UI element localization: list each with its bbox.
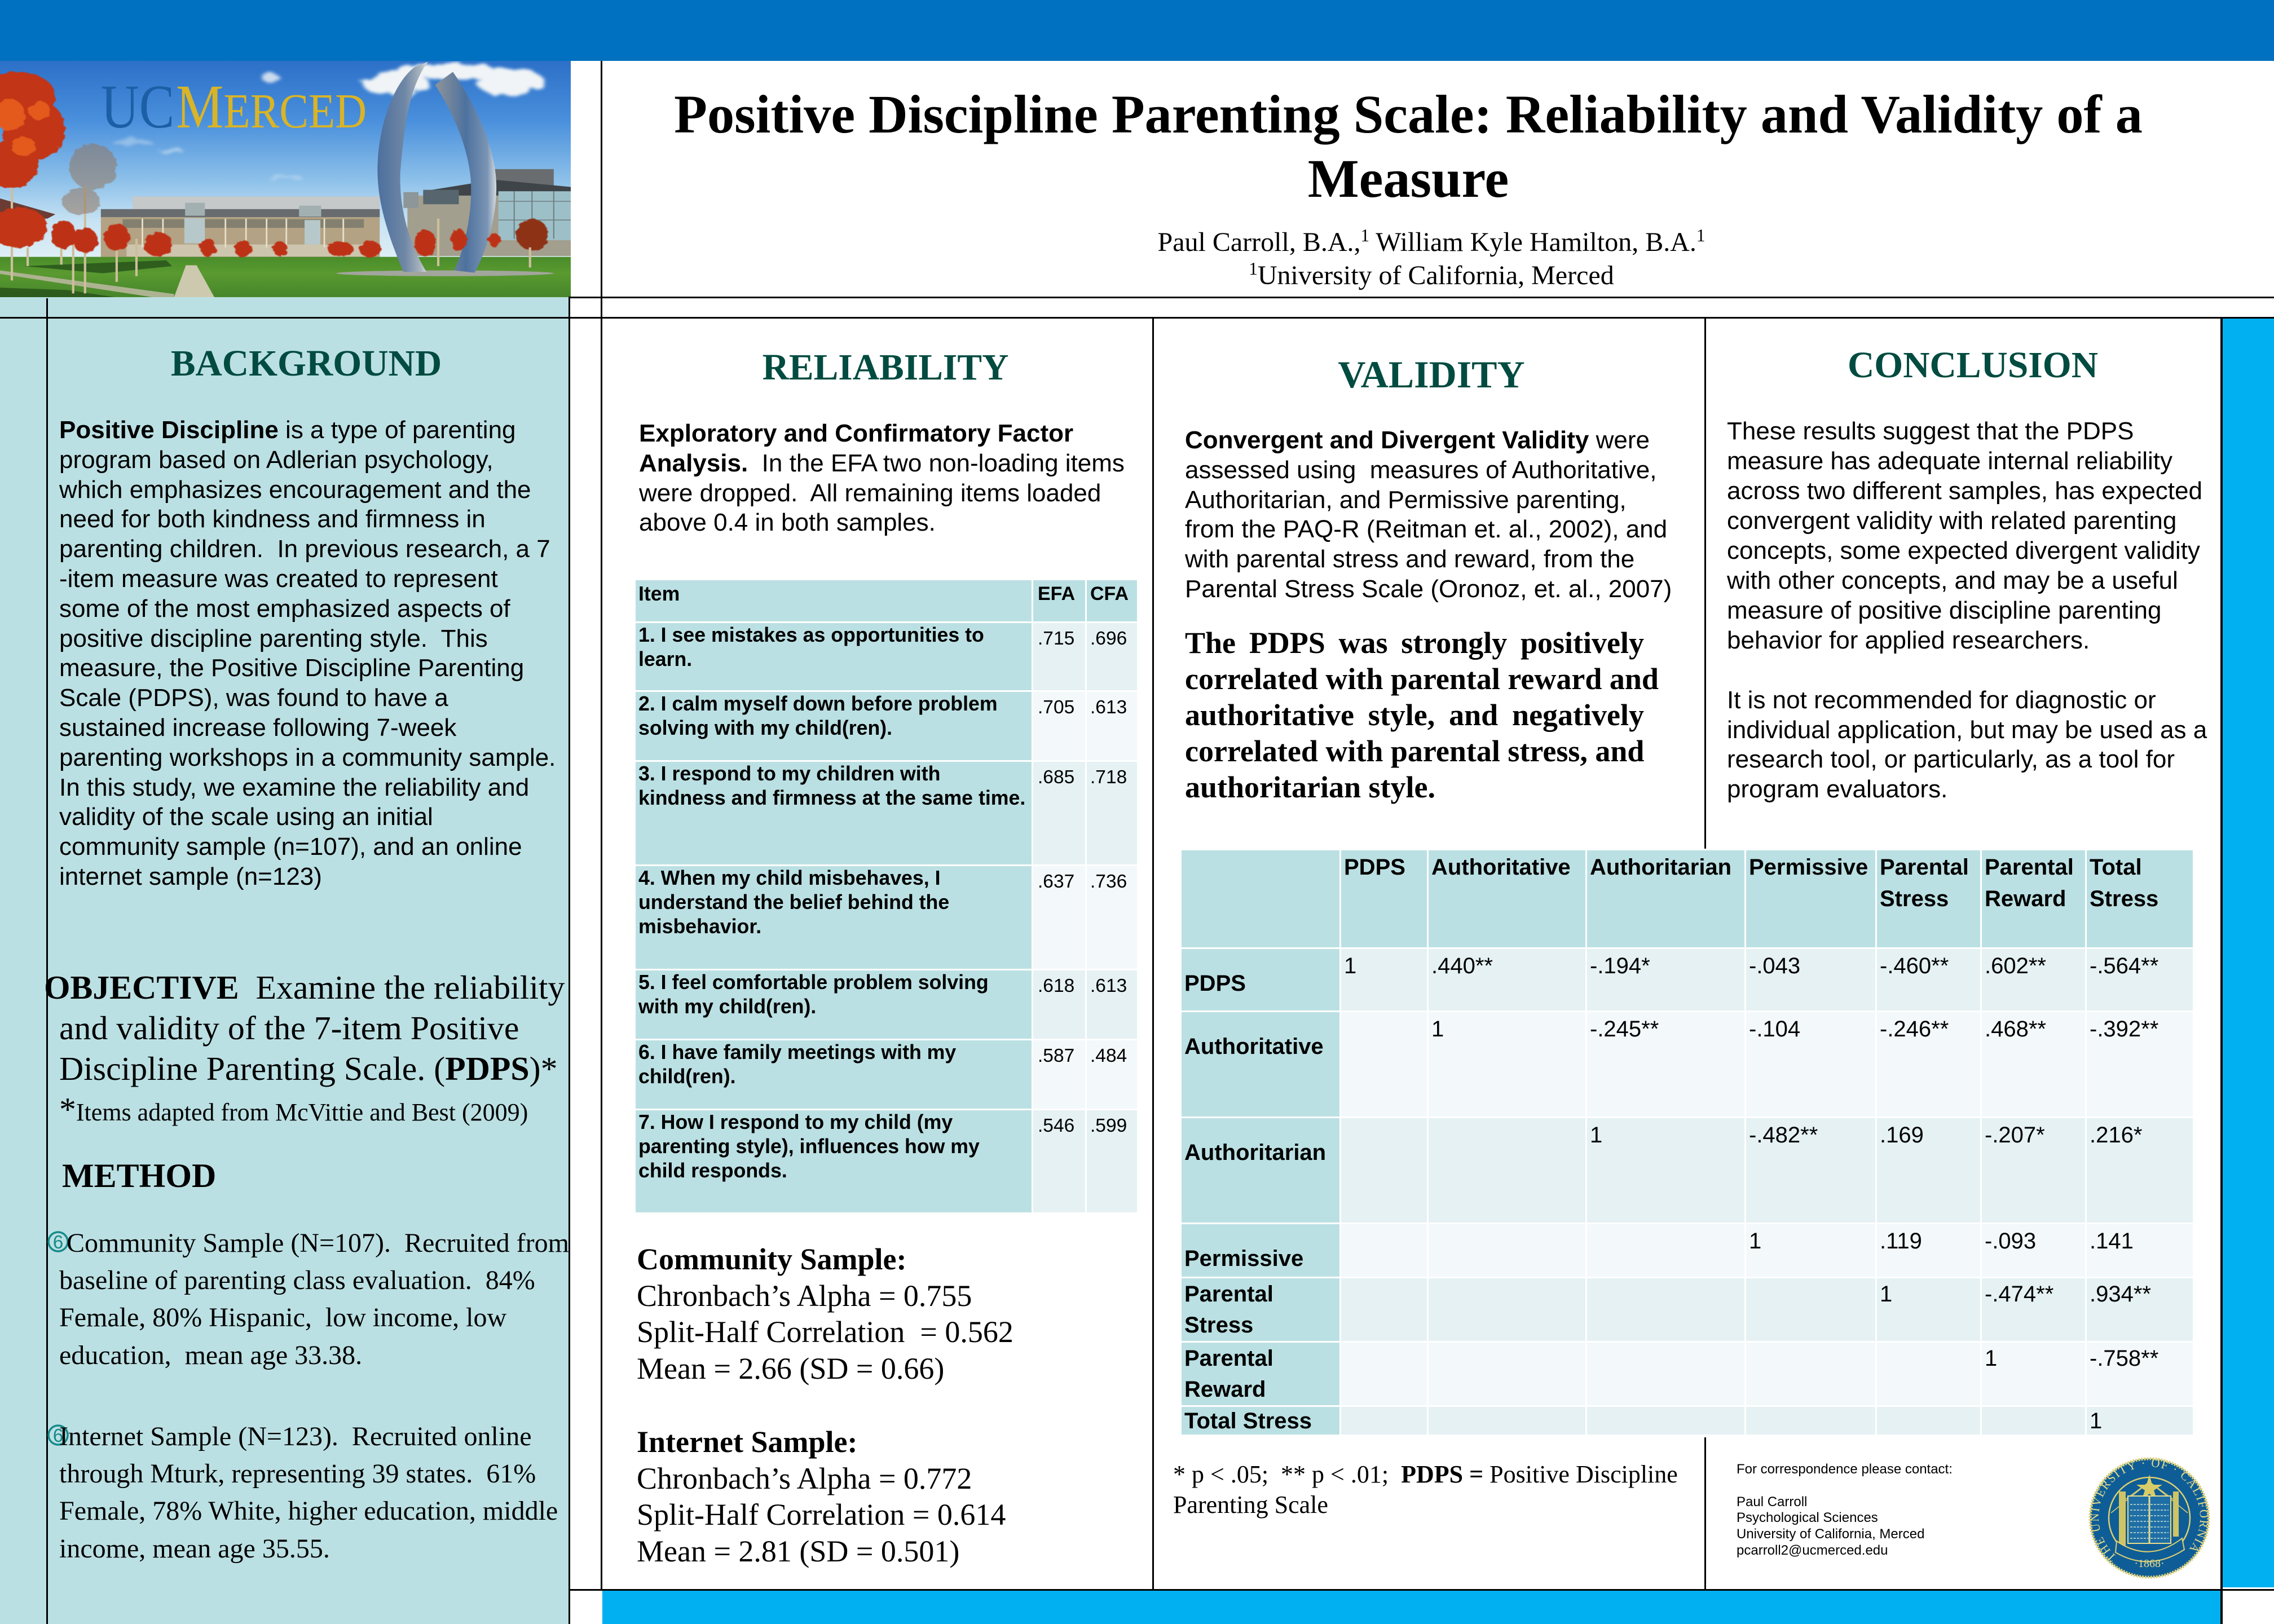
table: factor loadings: EFA: [1038, 583, 1075, 604]
trees: [12, 173, 438, 293]
sculpture arches: [377, 62, 428, 272]
text: conclusion: program evaluators.: [1727, 775, 1947, 803]
text: background: some of the most emphasized aspects of: [59, 595, 510, 623]
table: correlations: .440**: [1431, 954, 1493, 978]
authors: Paul Carroll, B.A.,1 William Kyle Hamilton, B.A.1: [1158, 226, 1705, 257]
text: validity: Convergent and Divergent Validity were: [1185, 426, 1650, 454]
stats: community sample: Chronbach’s Alpha = 0.755: [637, 1279, 972, 1313]
key finding: authoritarian style.: [1185, 770, 1435, 804]
text: conclusion: concepts, some expected divergent validity: [1727, 537, 2200, 564]
table: correlations: Authoritarian: [1184, 1140, 1326, 1165]
table: correlations: Authoritative: [1184, 1034, 1324, 1059]
table: factor loadings: .637: [1038, 871, 1074, 892]
table: correlations: 1: [1985, 1346, 1997, 1371]
table: factor loadings: .546: [1038, 1115, 1074, 1136]
table: correlations: 1: [1344, 954, 1356, 978]
table: correlations: Parental: [1184, 1282, 1273, 1307]
table: correlations: -.245**: [1590, 1017, 1659, 1042]
text: background: parenting workshops in a community sample.: [59, 744, 556, 771]
stats: internet sample: [637, 1425, 1006, 1568]
table: correlations: -.460**: [1880, 954, 1949, 978]
sculpture base: [336, 271, 554, 276]
table: correlations: -.104: [1749, 1017, 1800, 1042]
key finding: The PDPS was strongly positively: [1185, 626, 1644, 660]
table: correlations: -.093: [1985, 1229, 2036, 1254]
contact: Paul Carroll: [1737, 1494, 1807, 1510]
key finding: [1185, 626, 1659, 804]
text: conclusion: across two different samples, has expected: [1727, 477, 2202, 505]
table: correlations: -.043: [1749, 954, 1800, 978]
text: background: parenting children. In previous research, a 7: [59, 535, 550, 563]
contact: [1737, 1462, 1953, 1559]
table: factor loadings: child responds.: [638, 1159, 787, 1182]
text: conclusion: individual application, but may be used as a: [1727, 716, 2207, 744]
table: correlations: 1: [1880, 1282, 1892, 1307]
bullet: internet: 6: [53, 1425, 63, 1446]
table: correlations: Permissive: [1749, 855, 1868, 880]
text: validity: assessed using measures of Authoritative,: [1185, 456, 1656, 484]
footnote: Parenting Scale: [1173, 1491, 1328, 1519]
objective: and validity of the 7-item Positive: [59, 1009, 519, 1047]
contact: For correspondence please contact:: [1737, 1462, 1953, 1477]
table: factor loadings: understand the belief behind the: [638, 891, 949, 914]
table: correlations: Parental: [1184, 1346, 1273, 1371]
table: factor loadings: solving with my child(ren).: [638, 717, 892, 739]
table: correlations: Stress: [1184, 1313, 1253, 1338]
table: factor loadings: .696: [1090, 628, 1127, 649]
table: correlations: .934**: [2090, 1282, 2151, 1307]
table: factor loadings: 7. How I respond to my child (my: [638, 1111, 953, 1133]
left teal panel background: [0, 297, 570, 1624]
table: factor loadings: 6. I have family meetings with my: [638, 1041, 956, 1063]
table: correlations: -.246**: [1880, 1017, 1949, 1042]
icon: university seal: THE UNIVERSITY · OF · CALIFORNIA: [2091, 1459, 2208, 1562]
heading: method: METHOD: [62, 1157, 216, 1194]
text: background: which emphasizes encouragement and the: [59, 476, 531, 504]
table: factor loadings: .705: [1038, 697, 1074, 718]
table: factor loadings: 4. When my child misbehaves, I: [638, 867, 941, 889]
text: conclusion: convergent validity with related parenting: [1727, 507, 2176, 535]
table: factor loadings: misbehavior.: [638, 915, 761, 938]
table: factor loadings: .715: [1038, 628, 1074, 649]
footnote: * p < .05; ** p < .01; PDPS = Positive Discipline: [1173, 1460, 1678, 1488]
logo text: ERCED: [223, 84, 367, 138]
title: Positive Discipline Parenting Scale: Reliability and Validity of a: [674, 84, 2143, 144]
text: validity: [1185, 426, 1672, 603]
table: correlations: PDPS: [1184, 971, 1246, 996]
text: background: [59, 416, 556, 890]
title: Measure: [1308, 148, 1509, 209]
contact: pcarroll2@ucmerced.edu: [1737, 1543, 1888, 1558]
contact: Psychological Sciences: [1737, 1510, 1878, 1525]
text: background: internet sample (n=123): [59, 863, 322, 890]
text: community sample: [59, 1228, 569, 1370]
objective: Discipline Parenting Scale. (PDPS)*: [59, 1050, 557, 1087]
stats: community sample: Mean = 2.66 (SD = 0.66): [637, 1351, 944, 1385]
text: community sample: education, mean age 33.38.: [59, 1340, 362, 1370]
text: community sample: Female, 80% Hispanic, low income, low: [59, 1303, 506, 1332]
objective: [44, 969, 565, 1128]
table: factor loadings: child(ren).: [638, 1065, 735, 1088]
icon: university seal: ·1868·: [2134, 1557, 2165, 1570]
key finding: correlated with parental reward and: [1185, 662, 1659, 696]
table: correlations: Authoritative: [1431, 855, 1571, 880]
key finding: correlated with parental stress, and: [1185, 734, 1644, 768]
logo text: [101, 72, 367, 141]
table: correlations: Reward: [1184, 1377, 1266, 1402]
text: conclusion: It is not recommended for diagnostic or: [1727, 686, 2156, 714]
table: correlations: -.392**: [2090, 1017, 2158, 1042]
table: factor loadings: .718: [1090, 767, 1127, 788]
main building: [0, 196, 380, 258]
text: background: community sample (n=107), and an online: [59, 833, 522, 860]
table: factor loadings: parenting style), influences how my: [638, 1135, 980, 1158]
table: factor loadings: learn.: [638, 648, 692, 670]
table: correlations: 1: [1431, 1017, 1444, 1042]
frame rules: [568, 297, 2274, 298]
text: reliability: were dropped. All remaining items loaded: [639, 479, 1101, 507]
heading: conclusion: CONCLUSION: [1848, 345, 2098, 386]
table: correlations: 1: [1590, 1123, 1602, 1148]
text: community sample: Community Sample (N=107). Recruited from: [67, 1228, 569, 1258]
text: validity: from the PAQ-R (Reitman et. al., 2002), and: [1185, 515, 1667, 543]
table: correlations: -.474**: [1985, 1282, 2053, 1307]
logo text: M: [176, 72, 223, 141]
text: background: In this study, we examine the reliability and: [59, 774, 529, 801]
text: background: positive discipline parenting style. This: [59, 625, 488, 652]
text: validity: Authoritarian, and Permissive parenting,: [1185, 486, 1627, 514]
text: conclusion: with other concepts, and may be a useful: [1727, 567, 2178, 594]
table: correlations: .468**: [1985, 1017, 2046, 1042]
table: correlations: .141: [2090, 1229, 2134, 1254]
title: [674, 84, 2143, 209]
text: internet sample: [59, 1422, 558, 1564]
text: background: Positive Discipline is a type of parenting: [59, 416, 516, 444]
table: correlations: .119: [1880, 1229, 1922, 1254]
text: background: -item measure was created to represent: [59, 565, 498, 593]
table: factor loadings: kindness and firmness at the same time.: [638, 787, 1025, 809]
top banner: [0, 0, 2274, 61]
text: background: need for both kindness and firmness in: [59, 505, 486, 533]
text: conclusion: measure has adequate internal reliability: [1727, 447, 2172, 475]
text: internet sample: income, mean age 35.55.: [59, 1534, 330, 1564]
bullet: community: [47, 1231, 69, 1252]
footnote: [1173, 1459, 1678, 1520]
bottom cyan bar: [602, 1590, 2220, 1624]
campus photo: [0, 61, 571, 297]
table: factor loadings: 2. I calm myself down before problem: [638, 692, 998, 715]
text: validity: with parental stress and reward, from the: [1185, 545, 1634, 573]
table: correlations: Stress: [2090, 886, 2158, 911]
text: conclusion: These results suggest that the PDPS: [1727, 417, 2134, 445]
table: correlations: [1180, 849, 2194, 1436]
table: correlations: .602**: [1985, 954, 2046, 978]
table: factor loadings: 1. I see mistakes as opportunities to: [638, 624, 984, 646]
text: internet sample: Female, 78% White, higher education, middle: [59, 1496, 558, 1526]
clouds: [111, 62, 544, 180]
logo text: UC: [101, 72, 174, 141]
table: correlations: 1: [1749, 1229, 1761, 1254]
table: factor loadings: 3. I respond to my children with: [638, 762, 940, 785]
table: correlations: -.564**: [2090, 954, 2158, 978]
heading: validity: VALIDITY: [1338, 353, 1525, 396]
table: correlations: 1: [2090, 1409, 2102, 1433]
table: correlations: Total Stress: [1184, 1409, 1312, 1433]
text: background: Scale (PDPS), was found to have a: [59, 684, 448, 712]
table: correlations: -.207*: [1985, 1123, 2045, 1148]
stats: internet sample: Split-Half Correlation = 0.614: [637, 1498, 1006, 1532]
heading: reliability: RELIABILITY: [763, 347, 1008, 388]
stats: community sample: Community Sample:: [637, 1242, 907, 1276]
text: reliability: Exploratory and Confirmatory Factor: [639, 420, 1073, 447]
sky: [0, 61, 571, 262]
heading: background: BACKGROUND: [171, 343, 442, 384]
objective: OBJECTIVE Examine the reliability: [44, 969, 565, 1006]
table: factor loadings: 5. I feel comfortable problem solving: [638, 971, 989, 994]
text: background: sustained increase following 7-week: [59, 714, 456, 742]
text: validity: Parental Stress Scale (Oronoz, et. al., 2007): [1185, 575, 1672, 603]
table: factor loadings: with my child(ren).: [638, 995, 816, 1018]
table: correlations: Permissive: [1184, 1246, 1303, 1271]
table: factor loadings: .736: [1090, 871, 1127, 892]
stats: internet sample: Mean = 2.81 (SD = 0.501): [637, 1534, 959, 1568]
key finding: authoritative style, and negatively: [1185, 698, 1644, 732]
text: reliability: Analysis. In the EFA two non-loading items: [639, 449, 1125, 477]
table: factor loadings: .613: [1090, 697, 1127, 718]
objective: *Items adapted from McVittie and Best (2009): [59, 1091, 528, 1128]
text: conclusion: [1727, 417, 2207, 805]
text: reliability: above 0.4 in both samples.: [639, 509, 936, 536]
stats: community sample: [637, 1242, 1013, 1385]
table: correlations: Parental: [1985, 855, 2074, 880]
table: factor loadings: .587: [1038, 1045, 1074, 1066]
table: correlations: Reward: [1985, 886, 2066, 911]
right cyan bar: [2223, 319, 2274, 1587]
table: factor loadings: CFA: [1090, 583, 1129, 604]
authors: [1158, 226, 1705, 290]
table: correlations: -.758**: [2090, 1346, 2158, 1371]
table: factor loadings: [636, 580, 1137, 1212]
table: correlations: .169: [1880, 1123, 1924, 1148]
table: correlations: PDPS: [1344, 855, 1405, 880]
table: correlations: -.482**: [1749, 1123, 1818, 1148]
authors: 1University of California, Merced: [1249, 259, 1614, 290]
table: correlations: -.194*: [1590, 954, 1650, 978]
table: factor loadings: .613: [1090, 976, 1127, 996]
table: factor loadings: Item: [638, 582, 680, 605]
text: background: measure, the Positive Discipline Parenting: [59, 654, 524, 682]
text: conclusion: research tool, or particularly, as a tool for: [1727, 745, 2175, 773]
text: conclusion: behavior for applied researchers.: [1727, 626, 2090, 654]
bullet: internet: [47, 1424, 69, 1446]
table: correlations: Stress: [1880, 886, 1949, 911]
table: factor loadings: .599: [1090, 1115, 1127, 1136]
lawn: [0, 257, 571, 297]
bullet: community: 6: [53, 1232, 63, 1252]
table: correlations: .216*: [2090, 1123, 2142, 1148]
text: background: program based on Adlerian psychology,: [59, 446, 493, 474]
stats: internet sample: Chronbach’s Alpha = 0.772: [637, 1462, 972, 1495]
text: community sample: baseline of parenting class evaluation. 84%: [59, 1265, 535, 1295]
stats: internet sample: Internet Sample:: [637, 1425, 857, 1459]
table: factor loadings: .484: [1090, 1045, 1127, 1066]
text: internet sample: Internet Sample (N=123). Recruited online: [59, 1422, 531, 1451]
text: background: validity of the scale using an initial: [59, 803, 433, 831]
table: correlations: Total: [2090, 855, 2142, 880]
stats: community sample: Split-Half Correlation = 0.562: [637, 1315, 1013, 1349]
table: correlations: Parental: [1880, 855, 1969, 880]
text: conclusion: measure of positive discipline parenting: [1727, 597, 2161, 624]
text: internet sample: through Mturk, representing 39 states. 61%: [59, 1459, 536, 1489]
table: factor loadings: .685: [1038, 767, 1074, 788]
right building: [403, 169, 571, 256]
table: correlations: Authoritarian: [1590, 855, 1731, 880]
text: reliability: [639, 420, 1125, 536]
contact: University of California, Merced: [1737, 1526, 1924, 1542]
table: factor loadings: .618: [1038, 976, 1074, 996]
